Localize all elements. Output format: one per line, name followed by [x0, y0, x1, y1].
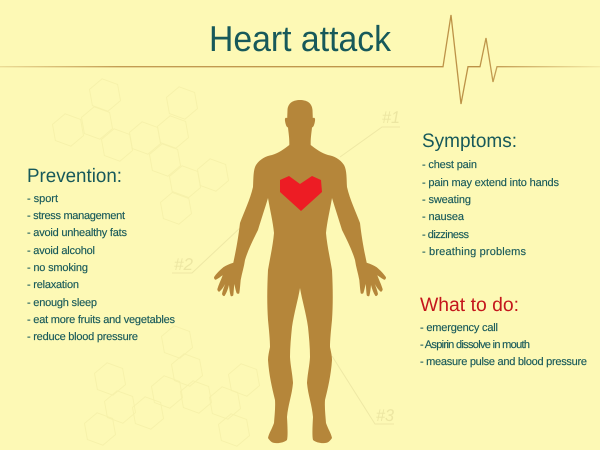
- list: prevention items: - relaxation: [27, 279, 79, 291]
- list: prevention items: [27, 193, 176, 343]
- list: symptoms items: - sweating: [422, 194, 471, 206]
- list: what to do items: - emergency call: [420, 322, 498, 334]
- panel: what to do: [420, 294, 587, 368]
- callout #2: [172, 228, 240, 274]
- list: prevention items: - stress management: [27, 210, 125, 222]
- callout #1: [340, 108, 400, 157]
- list: symptoms items: - dizziness: [422, 229, 470, 241]
- hexagon pattern: lower left: [84, 326, 260, 446]
- list: what to do items: - Aspirin dissolve in mouth: [420, 339, 530, 351]
- hexagon pattern: upper left: [52, 79, 228, 224]
- panel: prevention: [27, 165, 176, 343]
- list: prevention items: - enough sleep: [27, 297, 97, 309]
- heartbeat line: [0, 15, 600, 104]
- list: prevention items: - no smoking: [27, 262, 88, 274]
- callout #3: [332, 356, 395, 425]
- list: prevention items: - avoid unhealthy fats: [27, 227, 128, 239]
- heading: prevention: Prevention:: [27, 165, 122, 187]
- heading: symptoms: Symptoms:: [422, 130, 517, 152]
- list: what to do items: - measure pulse and blood pressure: [420, 356, 587, 368]
- callout #1: #1: [382, 108, 400, 127]
- title: Heart attack: [209, 18, 392, 59]
- list: prevention items: - eat more fruits and vegetables: [27, 314, 176, 326]
- list: prevention items: - reduce blood pressure: [27, 331, 138, 343]
- human body silhouette: [214, 100, 386, 443]
- heading: what to do: What to do:: [420, 294, 519, 316]
- list: what to do items: [420, 322, 587, 368]
- callout #3: #3: [376, 406, 395, 425]
- list: prevention items: - sport: [27, 193, 58, 205]
- icon: red heart: [280, 176, 322, 211]
- callout #2: #2: [174, 255, 194, 274]
- list: symptoms items: [422, 159, 560, 258]
- list: prevention items: - avoid alcohol: [27, 245, 95, 257]
- list: symptoms items: - breathing problems: [422, 246, 526, 258]
- list: symptoms items: - pain may extend into hands: [422, 177, 560, 189]
- list: symptoms items: - nausea: [422, 211, 465, 223]
- list: symptoms items: - chest pain: [422, 159, 477, 171]
- panel: symptoms: [422, 130, 560, 258]
